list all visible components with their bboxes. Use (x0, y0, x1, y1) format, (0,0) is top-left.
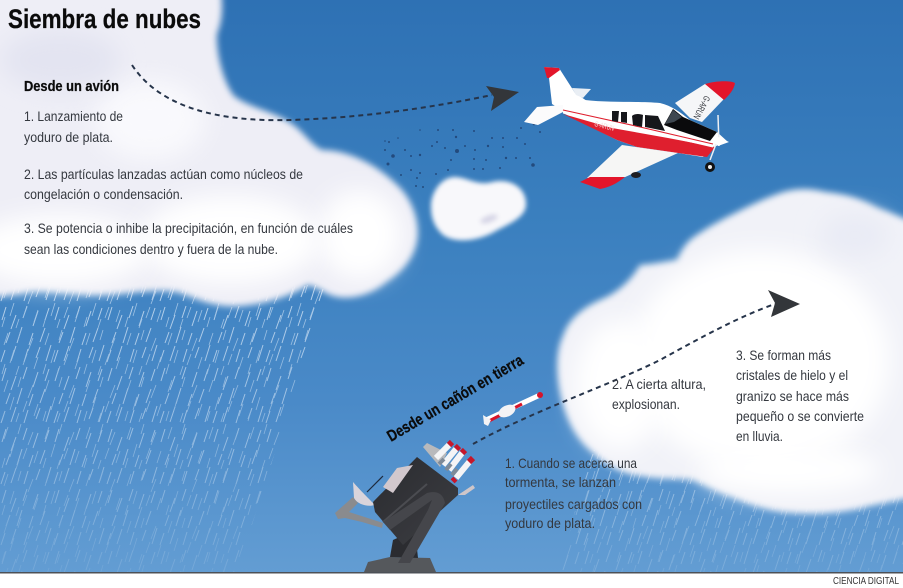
step 3 cannon: 3. Se forman más (736, 347, 831, 363)
step 1 cannon: 1. Cuando se acerca una (505, 455, 637, 471)
silver iodide particles (384, 123, 541, 188)
step 1 text: 1. Lanzamiento de (24, 108, 123, 124)
step 2 cannon: explosionan. (612, 396, 680, 412)
tail fin (544, 67, 590, 112)
step 1 text (24, 108, 123, 145)
bracket (383, 492, 445, 563)
step 3 text: 3. Se potencia o inhibe la precipitación, en función de cuáles (24, 220, 353, 236)
windshield and cowling (664, 109, 717, 141)
radar dish and arm (335, 497, 383, 528)
windows (612, 111, 665, 131)
step 2 cannon: 2. A cierta altura, (612, 376, 706, 392)
stabilizers (524, 105, 563, 125)
fuselage (563, 100, 728, 157)
title: Siembra de nubes (8, 4, 201, 34)
step 2 text: congelación o condensación. (24, 186, 183, 202)
step 1 text: yoduro de plata. (24, 129, 113, 145)
right cloud (557, 189, 903, 514)
rain under left cloud (0, 280, 340, 573)
heading: desde un cañón: Desde un cañón en tierra (384, 352, 527, 445)
step 3 cannon (736, 347, 864, 444)
step 1 cannon: yoduro de plata. (505, 515, 595, 531)
airplane: G-ARUN (594, 119, 615, 133)
step 2 text: 2. Las partículas lanzadas actúan como núcleos de (24, 166, 303, 182)
step 1 cannon: tormenta, se lanzan (505, 474, 616, 490)
step 1 cannon (505, 455, 642, 531)
projectile fins and tubes (423, 443, 447, 467)
left cloud (0, 0, 418, 306)
arrow: plane path (132, 65, 519, 120)
far wing (675, 83, 735, 122)
step 3 text (24, 220, 353, 257)
step 3 cannon: pequeño o se convierte (736, 408, 864, 424)
step 2 text (24, 166, 303, 202)
cannon body (373, 457, 458, 545)
airplane: G-ARUN (691, 94, 712, 121)
airplane (524, 67, 735, 189)
near wing (587, 145, 678, 178)
section: from an airplane (24, 78, 353, 257)
small cloud (431, 177, 526, 240)
step texts for cannon (505, 347, 864, 531)
step 3 cannon: en lluvia. (736, 428, 783, 444)
ground cannon (335, 442, 475, 572)
step 3 cannon: cristales de hielo y el (736, 367, 848, 383)
step 3 cannon: granizo se hace más (736, 388, 849, 404)
projectile (483, 392, 543, 426)
rain under right cloud (562, 450, 903, 572)
step 3 text: sean las condiciones dentro y fuera de la nube. (24, 241, 278, 257)
heading: desde un avión: Desde un avión (24, 78, 119, 95)
step 2 cannon (612, 376, 706, 412)
propeller and gear (710, 115, 719, 160)
light pad (383, 465, 413, 493)
step 1 cannon: proyectiles cargados con (505, 496, 642, 512)
pedestal (364, 557, 436, 572)
ground line (0, 572, 903, 574)
arrow: projectile path (473, 290, 800, 444)
